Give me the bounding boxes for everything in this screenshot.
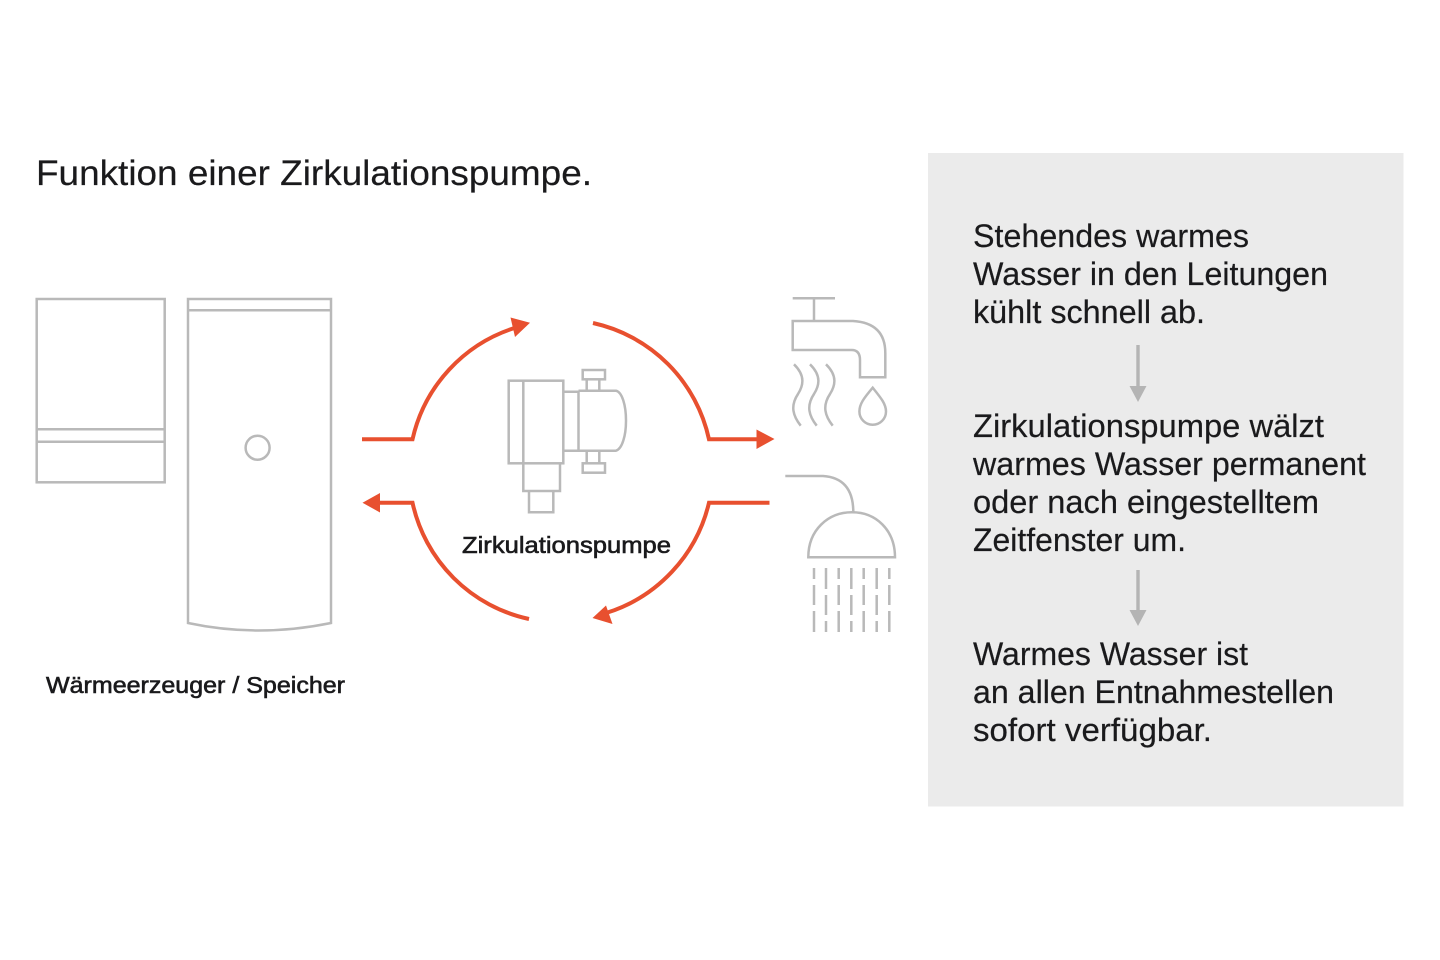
arrow: return from the shower (592, 503, 770, 624)
label: heat generator and storage: Wärmeerzeuger / Speicher (46, 672, 345, 698)
text block: step three (973, 636, 1334, 748)
icon: shower (785, 476, 895, 632)
text block: step three: an allen Entnahmestellen (973, 674, 1334, 710)
text block: step one: kühlt schnell ab. (973, 294, 1205, 330)
label: circulation pump: Zirkulationspumpe (462, 532, 671, 558)
arrow: step one to two (1130, 345, 1146, 402)
icon: circulation pump (509, 370, 626, 512)
icon: tap with hot water (793, 298, 886, 426)
text block: step three: sofort verfügbar. (973, 712, 1212, 748)
text block: step one: Wasser in den Leitungen (973, 256, 1328, 292)
title: Funktion einer Zirkulationspumpe. (36, 154, 592, 193)
arrow: flow out to the tap (593, 323, 774, 449)
panel: explanation (928, 153, 1404, 806)
text block: step two: Zirkulationspumpe wälzt (973, 408, 1324, 444)
text block: step three: Warmes Wasser ist (973, 636, 1248, 672)
text block: step one: Stehendes warmes (973, 218, 1249, 254)
arrow: return to the storage tank (362, 493, 529, 619)
text block: step two (972, 408, 1366, 558)
text block: step two: Zeitfenster um. (973, 522, 1186, 558)
icon: storage tank (188, 299, 331, 630)
text block: step one (973, 218, 1328, 330)
icon: heat generator (37, 299, 165, 482)
arrow: step two to three (1130, 570, 1146, 626)
text block: step two: warmes Wasser permanent (972, 446, 1366, 482)
text block: step two: oder nach eingestelltem (973, 484, 1319, 520)
arrow: flow into upper left arc (362, 318, 530, 439)
